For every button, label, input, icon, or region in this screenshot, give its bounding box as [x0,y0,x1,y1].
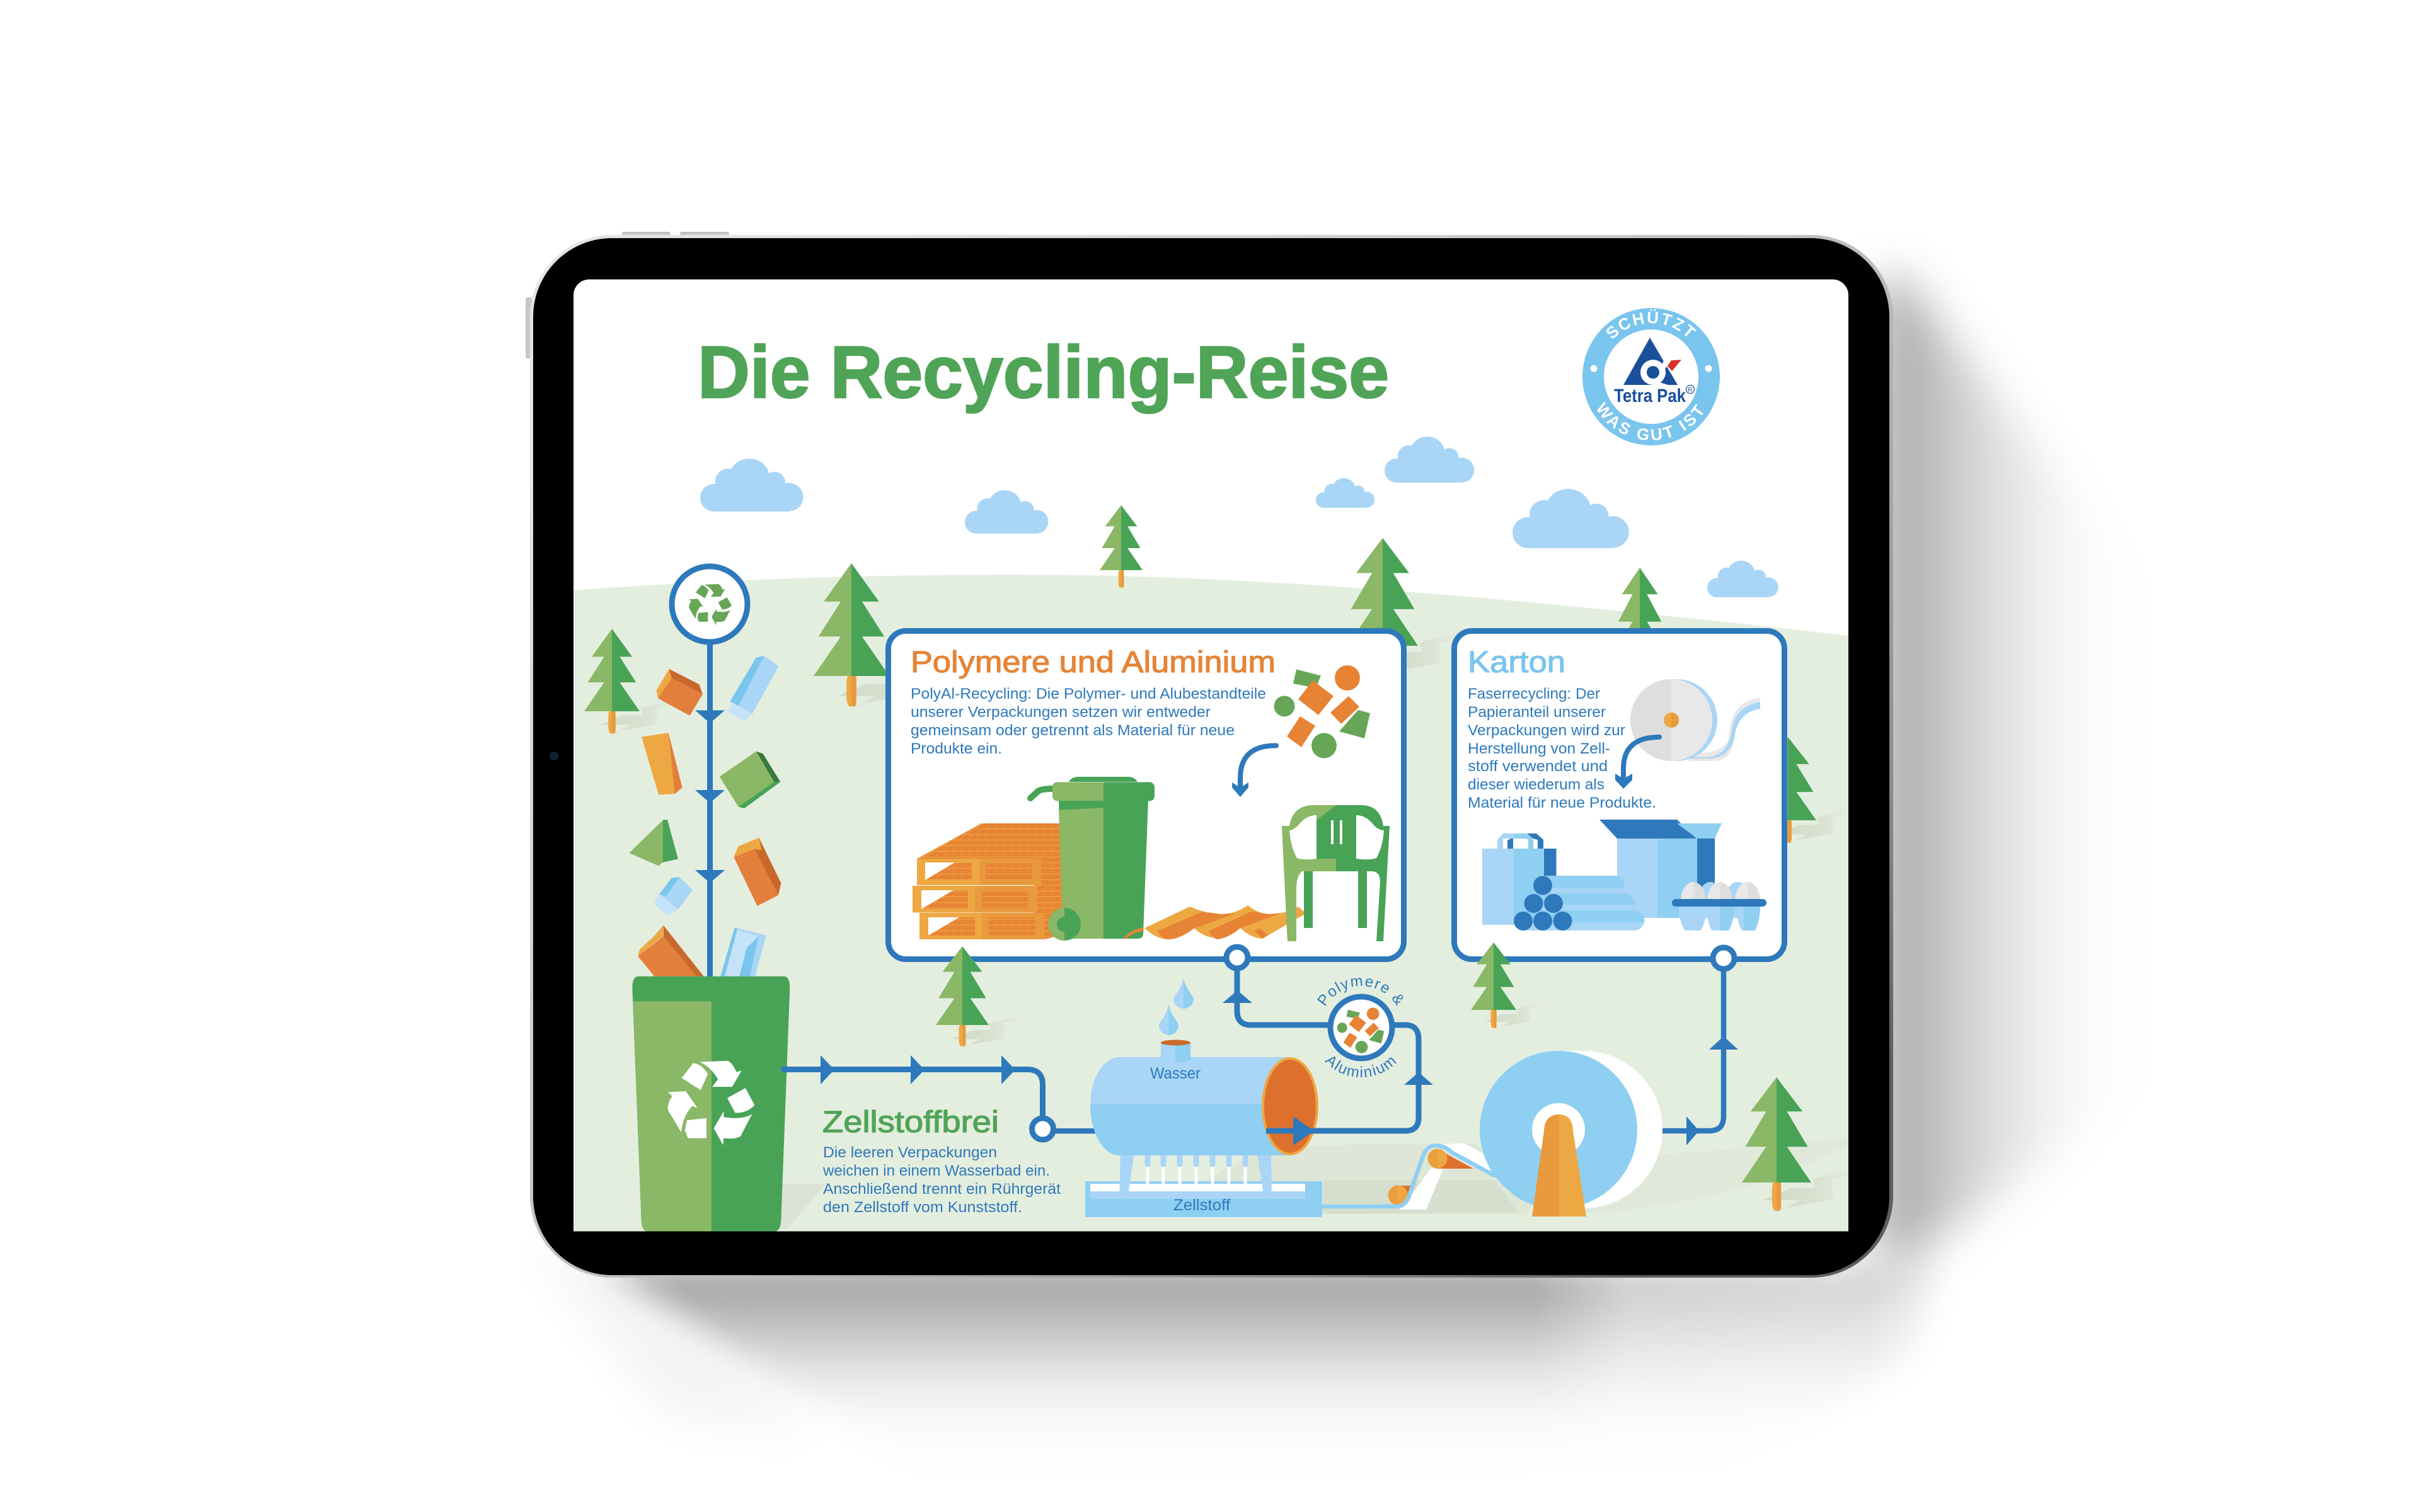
heading: Zellstoffbrei: Zellstoffbrei [822,1106,999,1139]
text block: Zellstoffbrei [822,1144,1061,1216]
flow line: big roll to karton panel [1657,970,1738,1145]
water drum [1090,1040,1317,1199]
body text: stoff verwendet und [1468,758,1608,775]
node: polymere panel input [1226,947,1248,968]
water drum: Wasser [1150,1065,1201,1082]
tablet drop shadow [529,277,2143,1474]
text block: Zellstoffbrei: Anschließend trennt ein Rührgerät [823,1181,1061,1198]
body text [1468,685,1656,811]
water drops [1159,978,1194,1035]
flow line: recycling sign to bin [695,643,725,976]
icon: stacked pallets [913,823,1065,939]
pulp bath: Zellstoff: Zellstoff [1173,1196,1230,1214]
text block: Zellstoffbrei: den Zellstoff vom Kunststoff. [823,1199,1022,1216]
logo: Tetra Pak badge: SCHÜTZT [1606,309,1697,338]
carton: green flat [720,752,780,808]
icon: recycling symbol [668,1061,754,1145]
screen: infographic [573,280,1848,1231]
carton: orange right [734,838,781,906]
trees in front of panels [936,942,1855,1211]
pallet: bottom [919,913,1044,939]
body text: Produkte ein. [911,740,1002,757]
roll stand [1532,1114,1559,1217]
body text: unserer Verpackungen setzen wir entweder [911,704,1211,721]
body text: Verpackungen wird zur [1468,722,1625,739]
heading: Karton [1468,646,1565,679]
ground hill [573,575,1848,1232]
flow line: drum to polymere panel [1223,967,1433,1145]
conveyor rollers and ribbon [1322,1143,1495,1210]
logo: Tetra Pak badge: WAS GUT IST [1597,402,1703,440]
drips [1148,1154,1245,1184]
icon: material flakes [1274,665,1370,759]
icon: roof tile [1124,905,1306,939]
carton: green wedge [629,820,678,866]
logo: Tetra Pak badge [1582,308,1720,445]
badge: Polymere & Aluminium: Polymere & [1317,978,1403,1006]
icon: garden chair [1282,805,1390,941]
carton: blue top right [728,656,779,721]
text block: Zellstoffbrei: Die leeren Verpackungen [823,1144,997,1161]
node: karton panel input [1713,948,1734,969]
icon: paper roll with ribbon [1630,679,1760,761]
body text: PolyAl-Recycling: Die Polymer- und Alubestandteile [911,685,1266,702]
carton: small blue [654,877,693,916]
logo: Tetra Pak badge: R [1688,387,1693,394]
big pulp roll [1480,1051,1662,1217]
wheel [1048,908,1081,941]
panel: Polymere und Aluminium [889,631,1404,959]
logo: Tetra Pak badge: Tetra Pak [1614,386,1686,406]
carton: orange top left [657,669,703,716]
icon: egg carton [1672,882,1766,931]
icon: green wheelie bin [1030,777,1155,941]
heading: Polymere und Aluminium [911,646,1276,679]
icon: paper bag [1482,833,1557,925]
title: Die Recycling-Reise [698,331,1389,413]
clouds [700,437,1778,597]
body text: Herstellung von Zell- [1468,740,1610,757]
pallet: top [917,859,1041,885]
flow line: bin to drum [781,1055,1097,1140]
trees behind panels [584,505,1851,843]
badge: Polymere & Aluminium: Aluminium [1325,1056,1397,1077]
carton: yellow orange [642,733,683,794]
body text: dieser wiederum als [1468,776,1605,793]
big bin [632,976,790,1232]
body text [911,685,1266,757]
carton: orange in bin [638,925,704,976]
arrow: flakes to products [1232,745,1276,797]
tablet frame [526,232,1893,1278]
pulp bath: Zellstoff [1085,1181,1322,1217]
icon: cardboard box [1599,820,1722,918]
arrow: roll to products [1615,737,1659,789]
body text: Faserrecycling: Der [1468,685,1600,702]
recycling sign circle [672,566,747,642]
body text: Material für neue Produkte. [1468,794,1656,811]
pallet: middle [913,886,1037,912]
text block: Zellstoffbrei: weichen in einem Wasserbad ein. [822,1162,1050,1179]
panel: Karton [1455,631,1785,959]
body text: Papieranteil unserer [1468,704,1606,721]
body text: gemeinsam oder getrennt als Material für neue [911,722,1235,739]
badge: Polymere & Aluminium [1317,978,1403,1077]
carton: blue in bin [720,927,766,976]
flying cartons and big recycling bin [629,656,790,1232]
ground shadows [778,1180,1519,1230]
icon: paper tubes stack [1514,876,1644,931]
